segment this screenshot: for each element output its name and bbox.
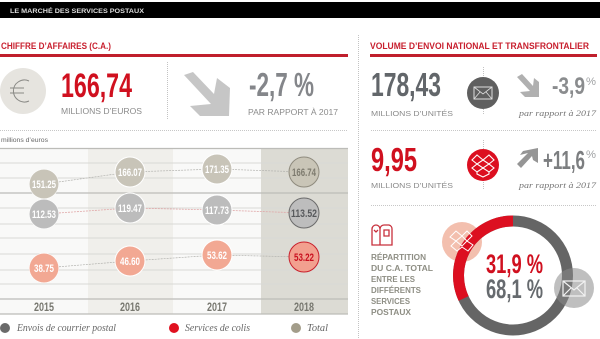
panel: volume d'envoi — [370, 41, 597, 330]
stat: total turnover: MILLIONS D’EUROS — [61, 107, 142, 116]
series: services de colis — [29, 240, 319, 283]
stat: parcel change — [518, 145, 597, 190]
stat: change versus 2017 — [248, 66, 339, 117]
stat: total turnover — [61, 67, 142, 116]
stat: parcel volume: 9,95 — [371, 141, 417, 178]
icon: parcel box — [467, 149, 499, 181]
text: répartition: DU C.A. TOTAL — [371, 264, 433, 273]
series: total: 151.25 — [32, 179, 56, 191]
legend: Services de colis — [185, 323, 250, 334]
stat: parcel change: par rapport à 2017 — [518, 180, 597, 190]
heading: chiffre d'affaires — [0, 41, 348, 57]
header bar — [0, 2, 600, 18]
series: envois de courrier postal: 113.52 — [291, 208, 317, 220]
icon: up arrow — [517, 148, 538, 168]
stat: total turnover: 166,74 — [61, 67, 132, 105]
stat: mail volume: 178,43 — [371, 66, 441, 103]
stat: mail change: -3,9 — [552, 73, 585, 100]
chart: donut split: 68,1 % — [486, 274, 543, 304]
series: envois de courrier postal: 117.73 — [205, 205, 229, 217]
stat: parcel volume: MILLIONS D’UNITÉS — [371, 181, 453, 190]
series: total: 166.74 — [292, 167, 317, 179]
stat: parcel volume — [371, 141, 453, 190]
x axis years: 2016 — [120, 300, 140, 314]
legend: Envois de courrier postal — [16, 323, 116, 334]
heading: volume d'envoi — [370, 41, 597, 57]
heading: chiffre d'affaires: CHIFFRE D’AFFAIRES (C.A.) — [1, 41, 111, 52]
icon: mailboxes — [372, 225, 392, 245]
stat: parcel change: % — [586, 149, 596, 161]
text: répartition: DIFFÉRENTS — [371, 286, 422, 295]
icon: euro coin — [0, 68, 46, 114]
x axis years: 2018 — [294, 300, 314, 314]
chart unit label: millions d’euros — [1, 137, 49, 144]
series: services de colis: 38.75 — [34, 263, 54, 275]
series: total: 171.35 — [205, 164, 229, 176]
header bar: LE MARCHÉ DES SERVICES POSTAUX — [10, 6, 145, 15]
text: répartition: ENTRE LES — [371, 275, 416, 284]
legend — [0, 323, 328, 334]
icon: envelope in donut — [563, 281, 585, 296]
stat: mail volume: MILLIONS D’UNITÉS — [371, 109, 453, 118]
stat: change versus 2017: -2,7 % — [249, 66, 314, 103]
donut values: 31,9 % — [486, 249, 543, 279]
icon: envelope — [467, 77, 499, 109]
stat: mail change — [518, 73, 597, 118]
icon: parcel in donut — [450, 231, 473, 251]
x axis years — [34, 300, 314, 314]
text: répartition — [371, 253, 433, 317]
series: total: 166.07 — [118, 167, 142, 179]
panel: chiffre d'affaires — [0, 41, 348, 334]
stat: mail volume — [371, 66, 453, 118]
series: total — [29, 154, 319, 199]
series: services de colis: 53.22 — [294, 252, 314, 264]
series: envois de courrier postal: 112.53 — [32, 209, 56, 221]
icon: down arrow — [184, 72, 230, 116]
x axis years: 2017 — [207, 300, 227, 314]
series: envois de courrier postal — [29, 192, 319, 229]
series: services de colis: 46.60 — [120, 256, 140, 268]
icon: down arrow small — [517, 74, 539, 97]
series: envois de courrier postal: 119.47 — [118, 203, 142, 215]
text: répartition: POSTAUX — [371, 308, 412, 317]
stat: mail change: % — [586, 76, 596, 88]
chart: line chart by year — [0, 137, 348, 314]
x axis years: 2015 — [34, 300, 54, 314]
text: répartition: RÉPARTITION — [371, 253, 426, 262]
stat: mail change: par rapport à 2017 — [518, 108, 597, 118]
legend: Total — [307, 323, 328, 334]
text: répartition: SERVICES — [371, 297, 411, 306]
stat: change versus 2017: PAR RAPPORT À 2017 — [248, 108, 339, 117]
series: services de colis: 53.62 — [207, 250, 227, 262]
chart: donut split — [442, 221, 594, 330]
